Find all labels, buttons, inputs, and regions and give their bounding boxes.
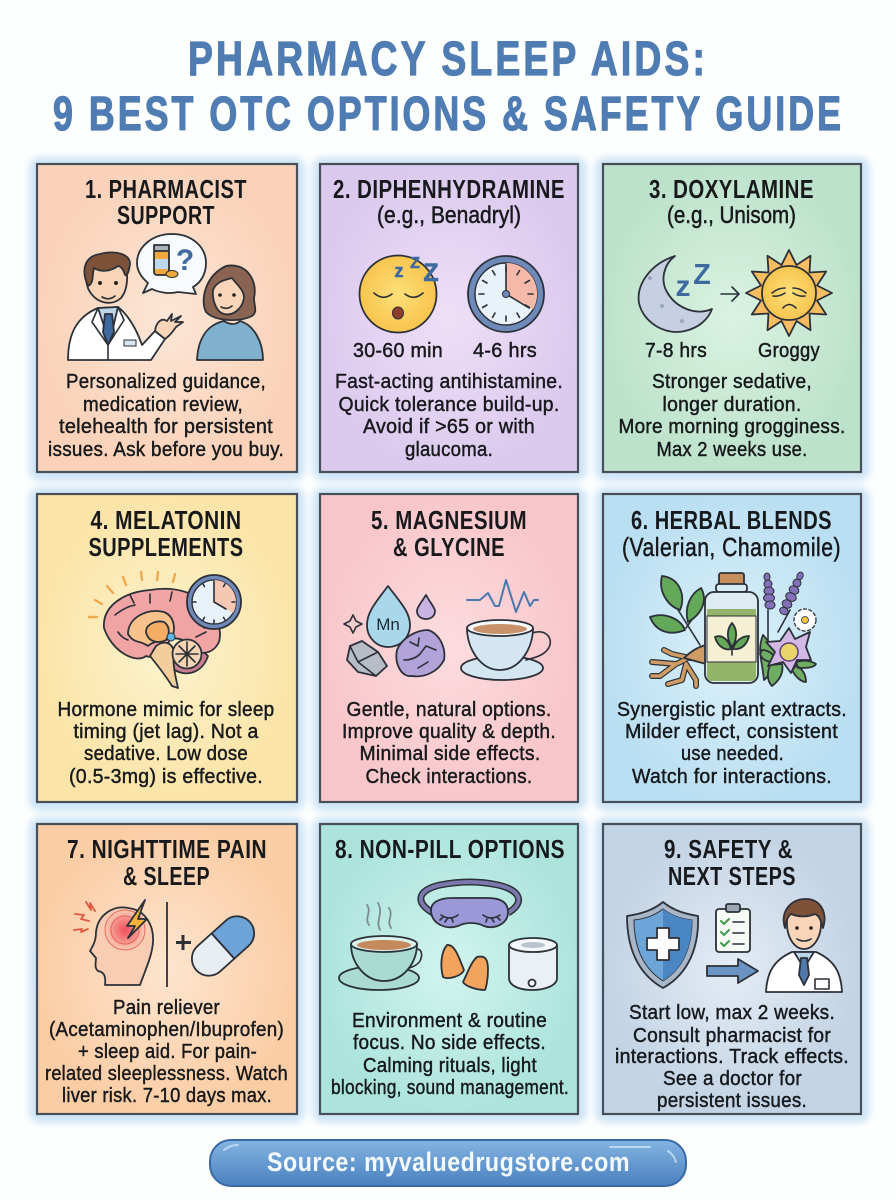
icon: patient (197, 265, 263, 360)
divider line (166, 902, 168, 987)
icon: capsule (185, 909, 261, 983)
icon: clock (187, 575, 241, 629)
panel: 8 non-pill options (320, 824, 578, 1114)
source pill button: Source: myvaluedrugstore.com (267, 1147, 630, 1177)
heading: & SLEEP (123, 861, 210, 891)
text block: persistent issues. (657, 1089, 807, 1112)
text block: Fast-acting antihistamine. (335, 370, 563, 393)
heading: 9. SAFETY & (664, 834, 793, 864)
icon: herbs and root (650, 576, 706, 686)
text block (45, 996, 288, 1107)
panel: 7 nighttime pain and sleep (37, 824, 297, 1114)
text block: Personalized guidance, (66, 370, 266, 393)
heading (88, 505, 244, 562)
text block (335, 370, 563, 461)
text block: timing (jet lag). Not a (74, 720, 259, 743)
icon: moon: z (676, 270, 690, 303)
text block: Pain reliever (113, 996, 220, 1019)
panel: 2 diphenhydramine (320, 164, 578, 472)
icon: sleeping face: Z (423, 259, 439, 287)
arrow (707, 959, 758, 983)
plus sign (176, 935, 191, 950)
heading: SUPPORT (117, 200, 215, 230)
text block: Milder effect, consistent (625, 720, 838, 743)
text block: Hormone mimic for sleep (58, 698, 274, 721)
icon: moon (639, 256, 712, 332)
icon: tea cup with steam (339, 903, 422, 990)
icon: clock (468, 256, 544, 332)
icon: shield (627, 902, 698, 988)
icon: minerals (344, 586, 444, 676)
heading: 4. MELATONIN (90, 505, 242, 535)
heading: 7. NIGHTTIME PAIN (67, 834, 267, 864)
arrow (721, 287, 739, 301)
icon: pulse line (467, 580, 538, 612)
icon labels (645, 339, 820, 362)
heading: 5. MAGNESIUM (371, 505, 527, 535)
text block (618, 370, 846, 461)
duration labels (353, 339, 537, 362)
text block: More morning grogginess. (618, 415, 846, 438)
text block: Stronger sedative, (652, 370, 812, 393)
icon: checklist (716, 904, 750, 952)
icon: brain (89, 572, 220, 688)
heading (85, 174, 247, 230)
text block: telehealth for persistent (59, 415, 273, 438)
icon: tea cup (461, 620, 550, 680)
icon: moon: Z (693, 259, 711, 291)
heading: 1. PHARMACIST (85, 174, 247, 204)
panel: 9 safety and next steps (603, 824, 861, 1114)
icon: groggy sun (746, 250, 832, 336)
text block: + sleep aid. For pain- (78, 1040, 257, 1063)
text block: Max 2 weeks use. (656, 438, 808, 461)
panel: 1 pharmacist support (37, 164, 297, 472)
text block: (0.5-3mg) is effective. (69, 765, 263, 788)
text block: Synergistic plant extracts. (617, 698, 847, 721)
heading (664, 834, 796, 891)
heading: (e.g., Unisom) (667, 202, 796, 229)
heading: 2. DIPHENHYDRAMINE (333, 174, 565, 204)
text block: focus. No side effects. (353, 1031, 546, 1054)
icon: sleeping face: z (394, 261, 404, 281)
text block: Minimal side effects. (360, 742, 540, 765)
heading: 8. NON-PILL OPTIONS (335, 834, 565, 864)
text block: related sleeplessness. Watch (45, 1062, 288, 1085)
heading: (e.g., Benadryl) (377, 202, 521, 229)
icon: head with pain (74, 900, 153, 985)
icon: speech bubble with medicine: ? (176, 244, 194, 277)
text block: blocking, sound management. (331, 1076, 569, 1099)
text block (58, 698, 274, 788)
panel: 6 herbal blends (603, 494, 861, 802)
text block: Consult pharmacist for (633, 1024, 831, 1047)
text block (342, 698, 556, 788)
text block: medication review, (83, 393, 243, 416)
heading: NEXT STEPS (668, 861, 796, 891)
panel: 4 melatonin supplements (37, 494, 297, 802)
icon: flowers (760, 571, 816, 686)
icon: ear plugs (441, 945, 488, 990)
text block: sedative. Low dose (84, 742, 248, 765)
text block: longer duration. (662, 393, 802, 416)
text block: Watch for interactions. (632, 765, 832, 788)
heading (622, 505, 841, 562)
icon: bottle (705, 573, 758, 683)
text block: See a doctor for (663, 1067, 802, 1090)
text block: liver risk. 7-10 days max. (62, 1084, 272, 1107)
heading: & GLYCINE (393, 532, 505, 562)
icon: sleep mask (421, 882, 519, 927)
text block: issues. Ask before you buy. (48, 438, 284, 461)
heading (333, 174, 565, 229)
icon: pharmacist (68, 252, 183, 360)
heading (371, 505, 527, 562)
icon: sleeping face: Z (410, 255, 420, 272)
text block (617, 698, 847, 788)
duration labels: 30-60 min (353, 339, 443, 362)
text block: glaucoma. (405, 438, 493, 461)
text block: Check interactions. (366, 765, 532, 788)
panel: 3 doxylamine (603, 164, 861, 472)
duration labels: 4-6 hrs (473, 339, 537, 362)
icon: sleeping face (360, 255, 439, 332)
source pill button (210, 1140, 686, 1186)
text block: Environment & routine (352, 1009, 547, 1032)
heading (67, 834, 267, 891)
panel: 5 magnesium and glycine (320, 494, 578, 802)
text block: Improve quality & depth. (342, 720, 556, 743)
icon: speech bubble with medicine (137, 234, 206, 294)
icon: minerals: Mn (376, 615, 400, 634)
text block (331, 1009, 569, 1099)
text block (48, 370, 284, 461)
heading (649, 174, 814, 229)
text block: use needed. (681, 742, 784, 765)
text block: Calming rituals, light (363, 1054, 537, 1077)
heading: 6. HERBAL BLENDS (631, 505, 832, 535)
icon labels: 7-8 hrs (645, 339, 707, 362)
text block: (Acetaminophen/Ibuprofen) (49, 1018, 284, 1041)
text block: interactions. Track effects. (615, 1045, 849, 1068)
title (53, 33, 844, 141)
icon: sound machine (509, 938, 557, 990)
text block: Start low, max 2 weeks. (629, 1001, 835, 1024)
text block: Avoid if >65 or with (363, 415, 535, 438)
heading: SUPPLEMENTS (88, 532, 244, 562)
title: PHARMACY SLEEP AIDS: (188, 33, 708, 86)
icon: doctor (766, 899, 842, 992)
text block: Gentle, natural options. (346, 698, 552, 721)
text block: Quick tolerance build-up. (338, 393, 560, 416)
icon labels: Groggy (758, 339, 820, 362)
text block (615, 1001, 849, 1112)
heading: 3. DOXYLAMINE (649, 174, 814, 204)
heading: (Valerian, Chamomile) (622, 532, 841, 562)
